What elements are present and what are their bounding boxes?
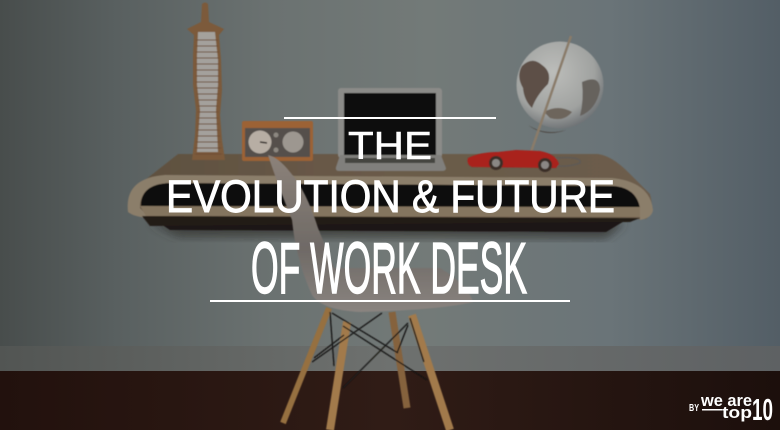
chair: [268, 155, 473, 430]
desk: [128, 154, 653, 238]
logo: by we are top 10: we are: [700, 391, 752, 410]
title line: THE: THE: [348, 125, 432, 168]
radio: [242, 121, 313, 161]
toy car: [468, 150, 580, 172]
background: baseboard: [0, 346, 780, 372]
bottom rule: [210, 300, 570, 302]
mannequin sculpture: [187, 2, 225, 160]
globe: [516, 36, 604, 152]
title line: EVOLUTION & FUTURE: EVOLUTION & FUTURE: [166, 171, 615, 222]
chair shell: [268, 155, 473, 312]
logo: by we are top 10: [689, 391, 773, 427]
logo: by we are top 10: BY: [689, 403, 699, 414]
top rule: [284, 117, 496, 119]
logo: by we are top 10: top: [722, 403, 752, 422]
chair legs: [283, 308, 450, 430]
background: floor: [0, 371, 780, 430]
laptop: [336, 88, 446, 171]
title block: [166, 117, 615, 309]
